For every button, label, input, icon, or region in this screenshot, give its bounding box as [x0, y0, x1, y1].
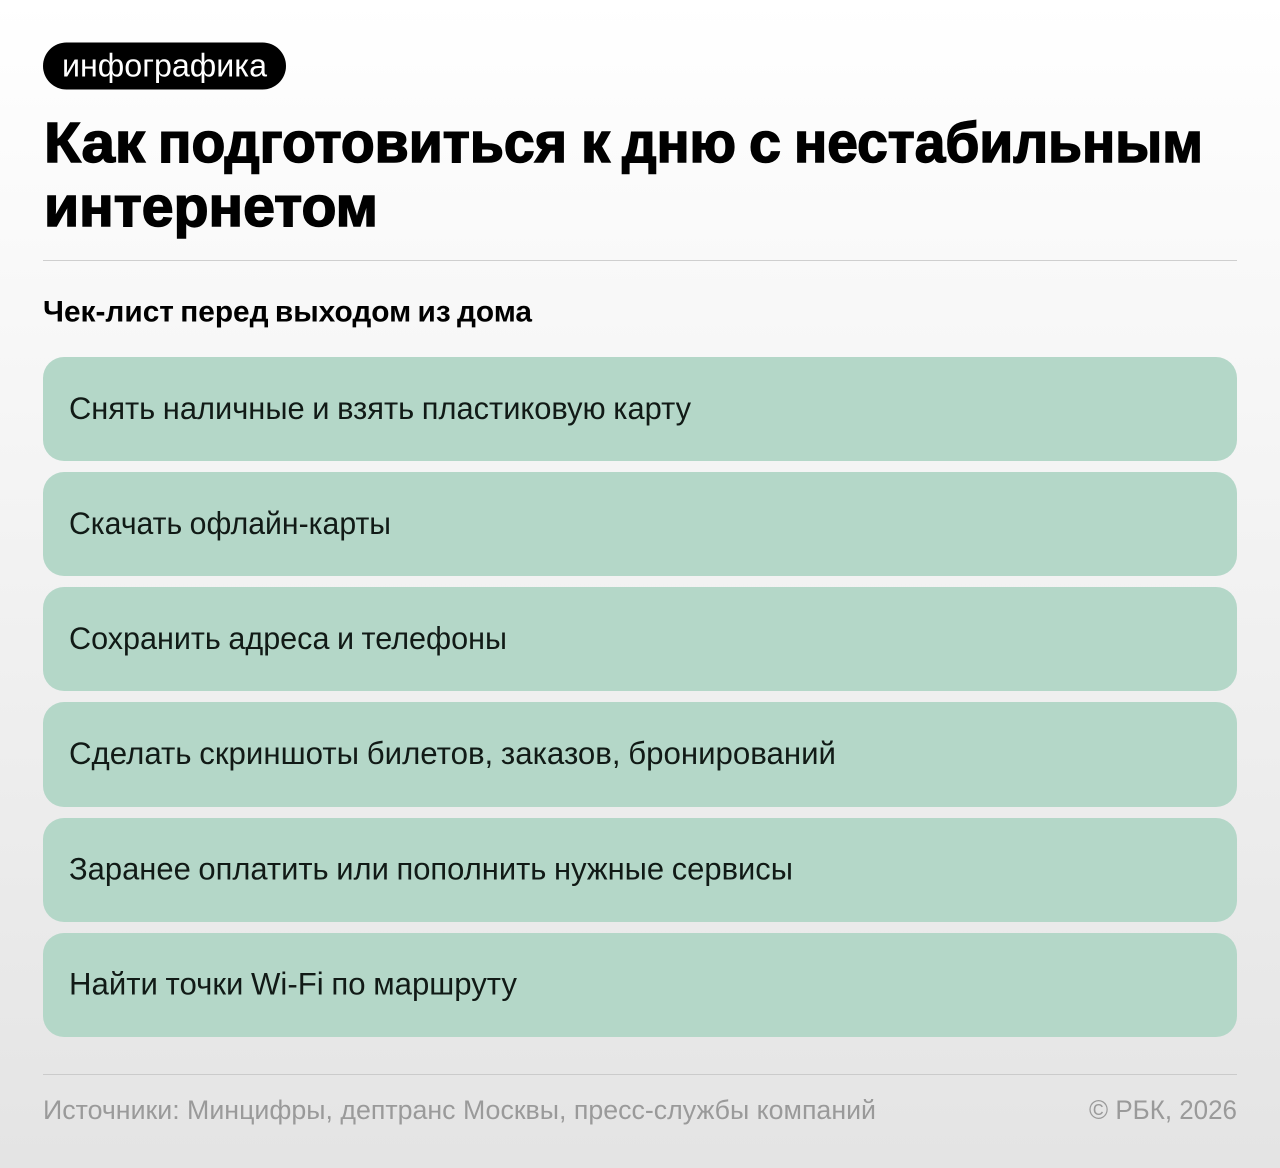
checklist item 3	[43, 587, 1237, 691]
checklist item 3: Сохранить адреса и телефоны	[69, 620, 507, 656]
subheading: checklist: Чек-лист перед выходом из дома	[43, 296, 532, 328]
checklist item 4: Сделать скриншоты билетов, заказов, бронирований	[69, 735, 836, 771]
title: с	[749, 111, 781, 175]
checklist item 1	[43, 357, 1237, 461]
title: нестабильным	[794, 111, 1203, 175]
copyright: © РБК, 2026	[1089, 1095, 1237, 1125]
checklist item 6	[43, 933, 1237, 1037]
checklist item 6: Найти точки Wi-Fi по маршруту	[69, 966, 517, 1002]
checklist item 2: Скачать офлайн-карты	[69, 505, 391, 541]
tag pill: инфографика: инфографика	[62, 48, 267, 84]
checklist item 5	[43, 818, 1237, 922]
checklist item 2	[43, 472, 1237, 576]
checklist item 1: Снять наличные и взять пластиковую карту	[69, 390, 691, 426]
sources note: Источники: Минцифры, дептранс Москвы, пресс-службы компаний	[43, 1095, 876, 1125]
checklist item 4	[43, 702, 1237, 807]
title: Как	[44, 111, 145, 175]
title: дню	[622, 111, 736, 175]
title	[44, 111, 1203, 239]
tag pill: инфографика	[43, 42, 286, 90]
title: к	[581, 111, 610, 175]
title: интернетом	[44, 175, 378, 239]
title: подготовиться	[158, 111, 567, 175]
checklist item 5: Заранее оплатить или пополнить нужные сервисы	[69, 850, 793, 886]
